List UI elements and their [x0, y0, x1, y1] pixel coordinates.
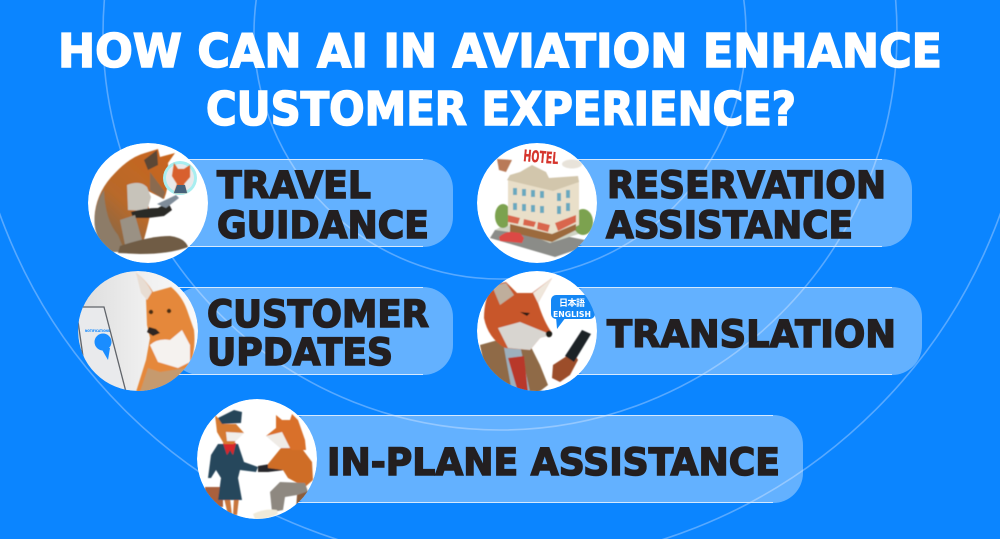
pill: customer updates — [170, 287, 453, 375]
icon: fox translating on phone: 日本語 — [559, 297, 585, 309]
panel: translation — [477, 271, 922, 395]
label: travel guidance: GUIDANCE — [217, 204, 429, 247]
label: reservation assistance: ASSISTANCE — [606, 204, 853, 247]
icon: fox translating on phone: ENGLISH — [553, 310, 591, 319]
label: reservation assistance: RESERVATION — [607, 164, 886, 207]
label: reservation assistance — [606, 164, 886, 247]
label: travel guidance — [217, 164, 429, 247]
label: customer updates — [207, 293, 429, 374]
icon: hotel building: HOTEL — [523, 146, 559, 168]
label: customer updates: CUSTOMER — [207, 293, 429, 336]
pill: travel guidance — [170, 159, 453, 247]
title: HOW CAN AI IN AVIATION ENHANCE — [58, 24, 942, 78]
icon: fox with phone and AI assistant — [88, 143, 208, 263]
panel: in-plane assistance — [197, 399, 803, 519]
icon: fox translating on phone — [477, 271, 597, 395]
title: CUSTOMER EXPERIENCE? — [206, 82, 796, 136]
pill: in-plane assistance — [280, 415, 803, 503]
pill: reservation assistance — [560, 159, 912, 247]
icon: fox looking at phone notification: NOTIFICATIONS — [85, 329, 110, 333]
panel: reservation assistance — [477, 143, 912, 263]
icon: two foxes shaking hands — [197, 399, 317, 519]
panel: customer updates — [76, 271, 453, 392]
label: in-plane assistance: IN-PLANE ASSISTANCE — [327, 441, 780, 484]
panel: travel guidance — [88, 143, 453, 263]
label: travel guidance: TRAVEL — [217, 164, 371, 207]
label: customer updates: UPDATES — [207, 331, 393, 374]
pill: translation — [560, 287, 922, 375]
label: translation: TRANSLATION — [607, 313, 896, 356]
icon: fox looking at phone notification — [76, 271, 198, 392]
title — [58, 24, 942, 136]
icon: hotel building — [477, 143, 597, 263]
